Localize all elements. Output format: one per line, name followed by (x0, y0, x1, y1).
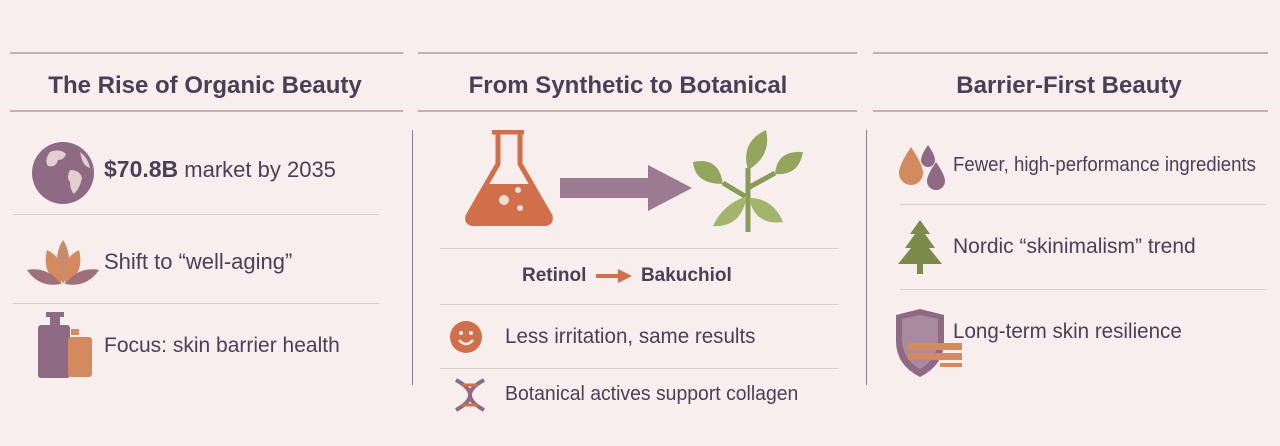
icon: globe (32, 142, 94, 204)
text: skinimalism: Nordic “skinimalism” trend (953, 235, 1196, 258)
panel: barrier-first (896, 72, 1266, 377)
icon: drops (899, 145, 945, 190)
text: less irritation: Less irritation, same results (505, 325, 755, 348)
text: barrier health: Focus: skin barrier health (104, 334, 340, 357)
icon: flask (465, 130, 553, 226)
text: fewer ingredients: Fewer, high-performance ingredients (953, 154, 1256, 176)
icon: lotus (27, 240, 99, 285)
text: market: $70.8B market by 2035 (104, 156, 336, 182)
icon: shield (896, 309, 962, 377)
text: resilience: Long-term skin resilience (953, 320, 1182, 343)
panel: organic beauty (13, 72, 379, 378)
text: Retinol to Bakuchiol: Retinol Bakuchiol (522, 265, 732, 286)
icon: smiley (450, 321, 482, 353)
heading: Barrier-First Beauty: Barrier-First Beauty (956, 72, 1182, 99)
icon: tree (898, 220, 942, 274)
panel: synthetic to botanical (440, 72, 838, 412)
arrow: synthetic to botanical (560, 165, 692, 211)
heading: From Synthetic to Botanical: From Synthetic to Botanical (469, 72, 787, 99)
text: well-aging: Shift to “well-aging” (104, 249, 292, 274)
icon: bottles (38, 312, 92, 378)
icon: DNA (455, 378, 485, 412)
heading: The Rise of Organic Beauty: The Rise of Organic Beauty (48, 72, 362, 99)
icon: plant (693, 130, 803, 232)
text: collagen: Botanical actives support collagen (505, 383, 798, 405)
